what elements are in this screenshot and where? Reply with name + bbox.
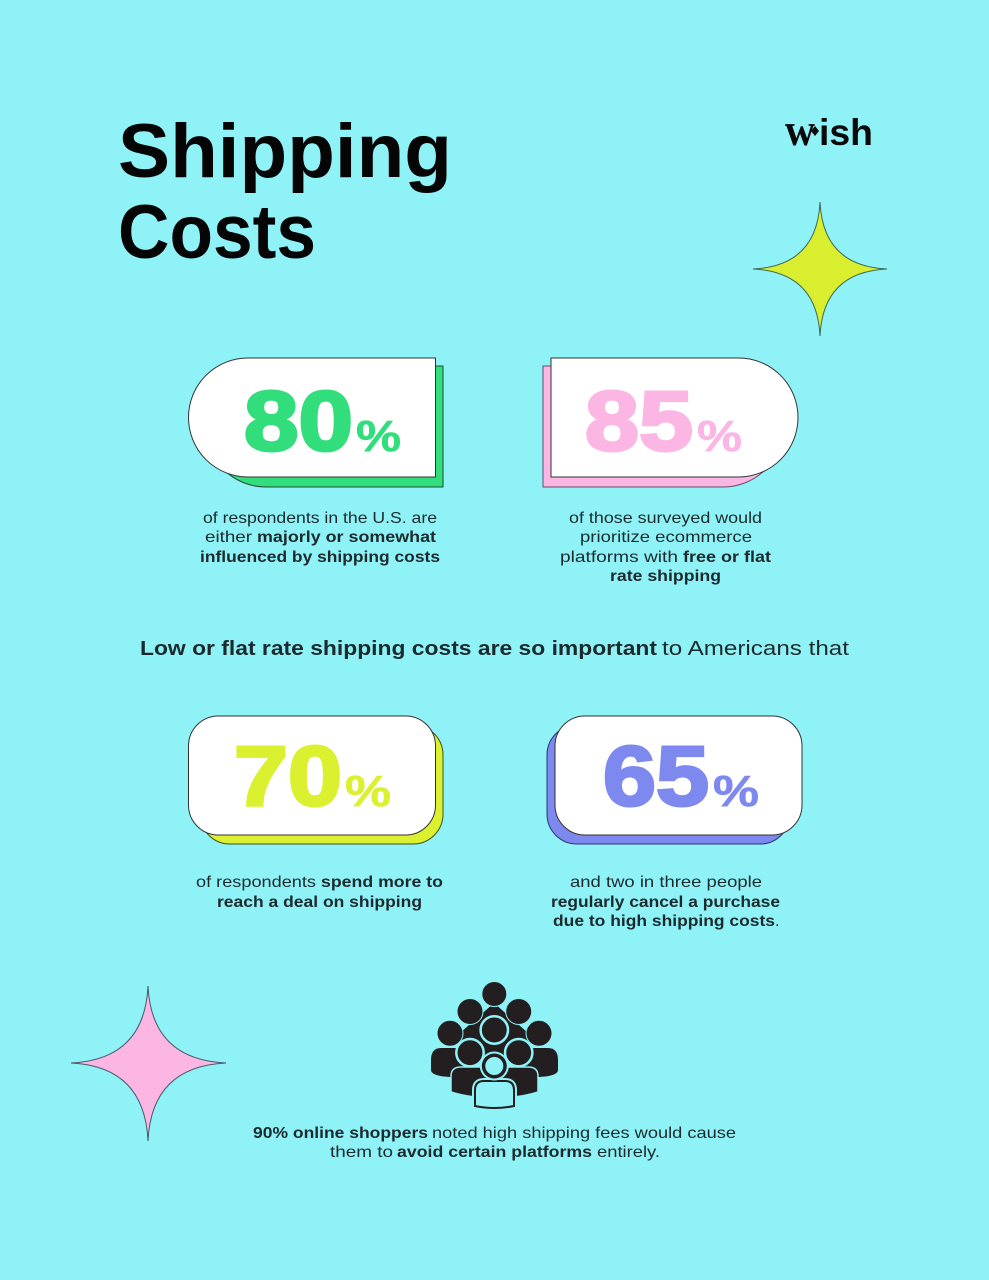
wish logo: w xyxy=(785,104,815,155)
caption: 70%: of respondents xyxy=(196,874,316,891)
icon: crowd of people xyxy=(431,982,558,1108)
title: Costs xyxy=(118,190,316,275)
card: 80% xyxy=(189,358,443,487)
icon: pink star xyxy=(71,986,226,1141)
card: 85% xyxy=(543,358,798,487)
caption: 90% online shoppers: avoid certain platforms xyxy=(397,1144,592,1161)
caption: 85%: prioritize ecommerce xyxy=(580,529,752,546)
caption: 85%: free or flat xyxy=(683,549,772,566)
card: 65% xyxy=(547,716,802,844)
subheading: to Americans that xyxy=(662,638,850,660)
title: Shipping xyxy=(118,109,452,194)
card: 70% xyxy=(188,716,443,844)
caption: 85%: platforms with xyxy=(560,549,678,566)
card: 80%: % xyxy=(356,412,401,461)
caption: 65% xyxy=(551,874,780,930)
card: 70%: % xyxy=(345,767,391,816)
caption: 85%: of those surveyed would xyxy=(569,510,762,527)
caption: 65%: and two in three people xyxy=(570,874,762,891)
title xyxy=(118,109,452,275)
caption: 80% xyxy=(200,510,440,566)
subheading: Low or flat rate shipping costs are so important xyxy=(140,638,657,660)
icon: yellow star xyxy=(753,202,887,336)
caption: 65%: . xyxy=(775,913,779,930)
caption: 70% xyxy=(196,874,443,911)
caption: 90% online shoppers: entirely. xyxy=(597,1144,660,1161)
card: 85%: 85 xyxy=(585,374,693,468)
caption: 85% xyxy=(560,510,772,585)
caption: 90% online shoppers: noted high shipping fees would cause xyxy=(432,1125,736,1142)
caption: 70%: reach a deal on shipping xyxy=(217,894,422,911)
caption: 80%: majorly or somewhat xyxy=(257,529,437,546)
card: 85%: % xyxy=(697,412,742,461)
caption: 80%: influenced by shipping costs xyxy=(200,549,440,566)
card: 65%: % xyxy=(713,767,759,816)
wish logo: ish xyxy=(819,112,873,153)
caption: 80%: of respondents in the U.S. are xyxy=(203,510,437,527)
caption: 65%: regularly cancel a purchase xyxy=(551,894,780,911)
caption: 90% online shoppers xyxy=(253,1125,736,1161)
card: 65%: 65 xyxy=(603,729,709,823)
caption: 70%: spend more to xyxy=(321,874,443,891)
wish logo xyxy=(785,104,873,155)
caption: 65%: due to high shipping costs xyxy=(553,913,775,930)
caption: 90% online shoppers: 90% online shoppers xyxy=(253,1125,428,1142)
caption: 90% online shoppers: them to xyxy=(330,1144,393,1161)
subheading xyxy=(140,638,850,660)
caption: 80%: either xyxy=(205,529,253,546)
card: 70%: 70 xyxy=(234,729,342,823)
caption: 85%: rate shipping xyxy=(610,568,721,585)
card: 80%: 80 xyxy=(244,374,353,468)
